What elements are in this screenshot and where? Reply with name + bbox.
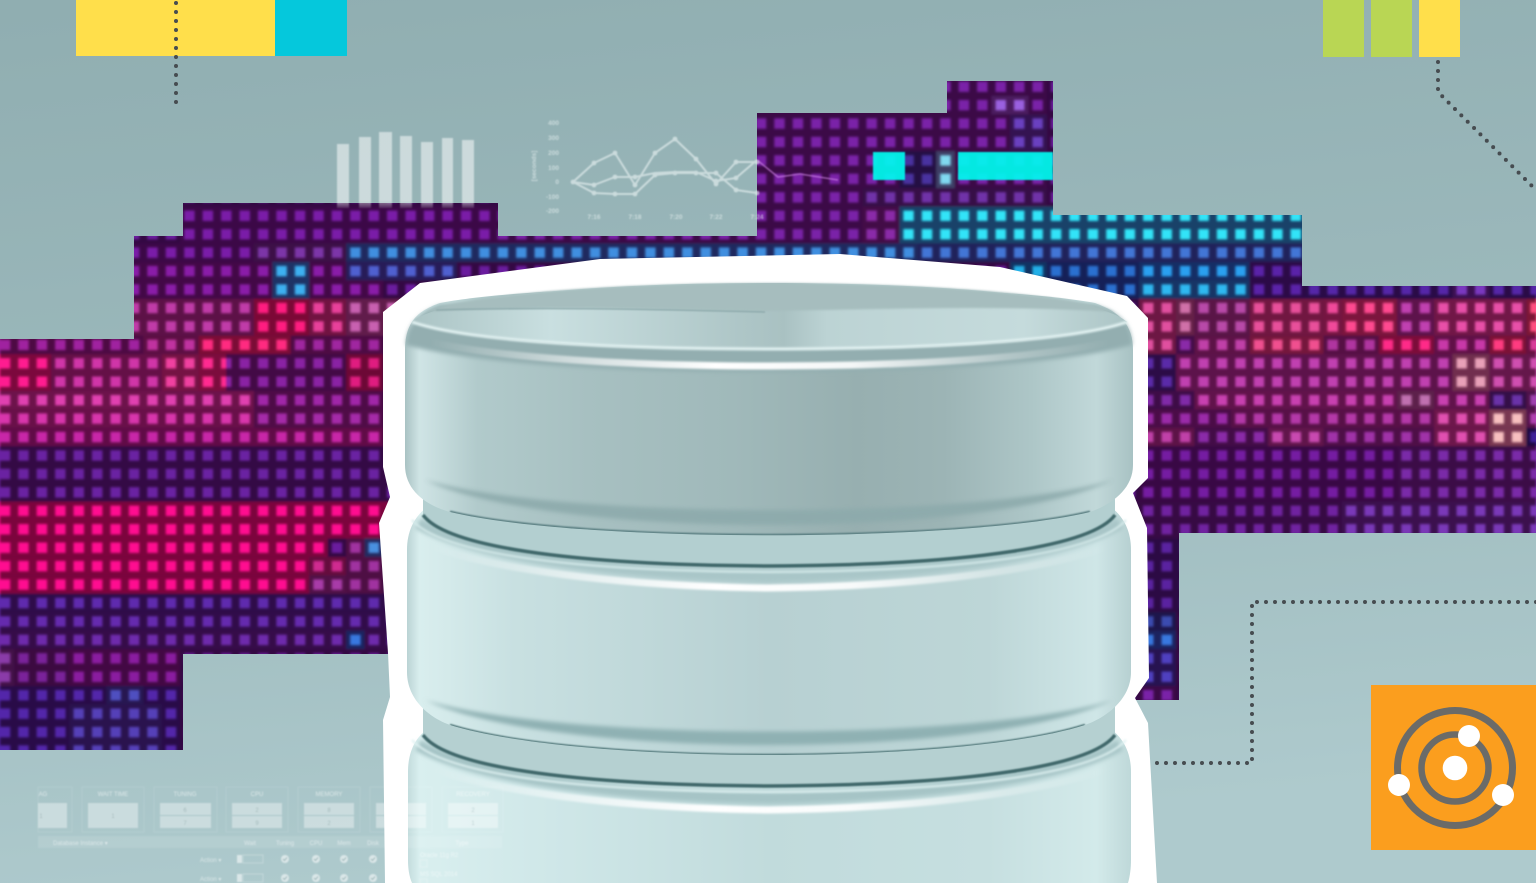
dashboard metric labels: TUNING [174,792,197,798]
lid highlights [412,322,1127,349]
dotted connector: top left [174,3,178,105]
lid rim [406,305,1132,372]
dashboard table header: Mem [337,841,351,847]
dashboard table rows: MS SQL 2014 [420,872,458,878]
dashboard metric tiles [38,787,503,832]
dashboard table header: Type [455,841,469,847]
database tier 1 [405,283,1133,535]
dashboard metric labels: MEMORY [316,792,342,798]
icon: database cylinder [405,283,1133,883]
dashboard table header: Tuning [276,841,294,847]
dashboard metric labels: 9 [255,821,259,827]
bright cyan highlight bands [873,152,1053,180]
dashboard metric labels: 1 [471,821,475,827]
dotted connector: top right [1438,62,1536,190]
dashboard metric labels: 7 [183,821,187,827]
y axis labels: 400 [548,120,559,127]
series continuation over the grid [757,160,838,180]
dashboard metric labels: 1 [111,814,115,820]
dashboard metric labels: AG [39,792,48,798]
dashboard metric labels: RECOVERY [456,792,490,798]
pixel cell grid overlay [0,70,1536,770]
dashboard metric labels [39,792,490,827]
dashboard metric labels: 8 [327,808,331,814]
database tier 2 [407,470,1131,755]
logo badge [1371,685,1536,850]
dashboard metric labels: 2 [255,808,259,814]
dashboard metric labels: CPU [251,792,263,798]
y axis labels: -100 [546,194,559,201]
line chart [531,120,838,221]
bar chart [337,132,474,208]
decorative block: cyan [275,0,347,56]
dashboard metric labels: 2 [471,808,475,814]
decorative block: yellow [76,0,275,56]
dashboard metric labels: WAIT TIME [98,792,128,798]
dashboard metric labels: 1 [39,814,43,820]
x axis labels: 7:22 [709,214,723,221]
icon: orbit nodes [1388,725,1514,806]
lid back shade [425,283,1115,312]
series lines [573,139,757,194]
dotted connector: to logo [1154,602,1536,763]
icon: database white sticker outline [379,254,1157,883]
y axis labels [531,120,559,215]
y axis labels: -200 [546,208,559,215]
tier 2 bottom rim shading [425,700,1113,755]
y axis labels: 100 [548,165,559,172]
dashboard metric values [38,803,498,828]
dashboard table rows [200,853,459,883]
dashboard metric labels: DISK [394,792,408,798]
dashboard table header: CPU [310,841,322,847]
x axis labels: 7:24 [750,214,764,221]
dashboard overlay [38,787,503,883]
dashboard table header: Wait [244,841,256,847]
lid top surface [412,283,1127,349]
x axis labels: 7:20 [669,214,683,221]
series markers [571,137,759,196]
icon: orbit rings [1398,710,1512,826]
y axis labels: 200 [548,150,559,157]
dashboard table rows: Oracle 11g R2 [420,853,459,859]
dashboard table header: Database Instance ▾ [53,841,108,847]
decorative blocks: green and yellow [1323,0,1460,57]
dashboard metric labels: 6 [183,808,187,814]
database tier 3 [408,690,1131,883]
x axis labels [587,214,764,221]
y axis labels: 300 [548,135,559,142]
x axis labels: 7:18 [628,214,642,221]
dashboard table rows: Action ▾ [200,877,221,883]
dashboard table header [38,836,502,848]
y axis labels: 0 [555,179,559,186]
y axis labels: [seconds] [531,151,538,181]
x axis labels: 7:16 [587,214,601,221]
dashboard table rows: Action ▾ [200,858,221,864]
dashboard table header: Disk [367,841,380,847]
tier 1 bottom rim shading [425,480,1113,535]
dashboard metric labels: 2 [327,821,331,827]
